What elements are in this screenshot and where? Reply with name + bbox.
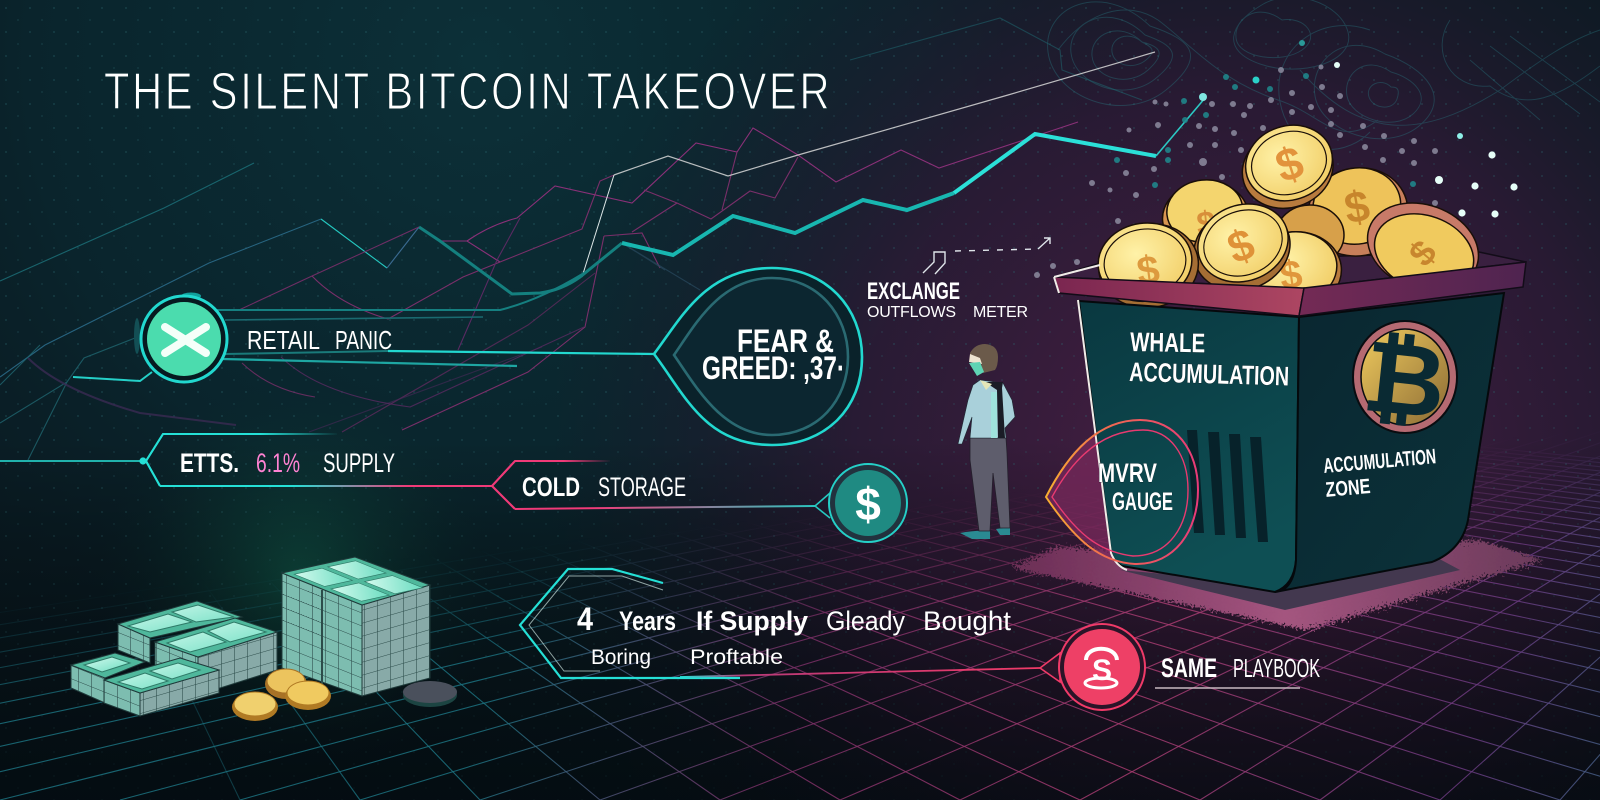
label: retail panic [247,325,392,355]
text: boring profitable: Boring [591,646,651,669]
exchange outflows meter: EXCLANGE [867,278,960,305]
bin interior [1054,252,1526,288]
callout: ETFs supply [0,434,492,486]
icon: meter arrow [923,238,1050,274]
text: years of supply: 4 [577,601,593,637]
bin body right face [1275,293,1504,592]
label: accumulation zone: ZONE [1325,475,1371,502]
text: MVRV gauge: MVRV [1098,458,1157,488]
text: years of supply: Bought [923,606,1012,636]
coin pile: $ [1221,219,1261,274]
icon: same playbook badge: S [1092,654,1112,687]
hair and head [970,344,998,373]
whale accumulation bin [1046,114,1526,610]
exchange outflows meter: OUTFLOWS [867,304,956,321]
text: cold storage: COLD [522,472,580,502]
cash stack: low left [71,653,145,703]
perspective floor grid [0,442,1600,800]
label: whale accumulation [1129,327,1290,391]
figure: person looking at the bin [958,344,1015,539]
exchange outflows meter [867,238,1050,321]
text: fear and greed value [702,323,845,386]
label: accumulation zone: ACCUMULATION [1322,445,1437,478]
vent slots [1187,430,1268,542]
coin pile: $ [1400,232,1445,274]
text: years of supply: Years [619,606,676,636]
topographic contours [1048,0,1600,149]
callout: retail panic [73,273,654,382]
label: retail panic: PANIC [335,325,392,355]
coin pile: $ [1277,252,1305,299]
label: accumulation zone [1322,445,1439,502]
coin pile: $ [1269,135,1310,193]
main rising teal chart line [419,98,1205,294]
trousers [970,438,1010,531]
title: THE SILENT BITCOIN TAKEOVER [104,62,830,120]
bright glowing dots [1199,40,1518,218]
text: boring profitable: Proftable [690,646,783,669]
shoes [960,527,1010,539]
gauge: MVRV [1046,420,1198,564]
coin pile: $ [1134,247,1162,294]
icon: bitcoin medallion: ₿ [1358,317,1451,442]
label: whale accumulation: WHALE [1130,327,1205,358]
label: whale accumulation: ACCUMULATION [1129,357,1290,391]
white highlight edge [1054,265,1127,570]
icon: dollar badge: $ [855,478,881,530]
coin pile [1093,114,1491,318]
label: retail panic: RETAIL [247,325,320,355]
text: years of supply: If Supply [696,606,808,636]
coin pile: $ [1341,181,1373,234]
cash stack: tall [282,557,430,696]
text: MVRV gauge: GAUGE [1112,488,1173,516]
text: years of supply: Gleady [826,606,905,636]
cash stack: middle [155,618,277,695]
text: ETFs 6.1% supply: SUPPLY [323,448,395,478]
cash stack: back [118,601,242,663]
text: years of supply [577,601,1012,637]
icon: same playbook badge [1040,624,1145,710]
exchange outflows meter: METER [973,304,1028,321]
coin pile: $ [1195,204,1218,244]
particle dots [1034,64,1438,278]
label: same playbook [1155,653,1320,688]
callout: cold storage [492,461,815,509]
text: cold storage [522,472,686,502]
text: MVRV gauge [1098,458,1173,516]
label: same playbook: PLAYBOOK [1233,653,1320,683]
shirt [958,380,1015,444]
text: fear and greed value: GREED: ,37· [702,350,845,386]
illustration: stacks of cash [71,557,457,721]
icon: X badge [134,292,227,382]
callout: years of supply already bought [520,569,1040,678]
bin body left face [1079,301,1299,592]
text: cold storage: STORAGE [598,472,686,502]
text: fear and greed value: FEAR & [737,323,834,359]
gauge: fear and greed [654,268,862,445]
text: boring profitable [591,646,783,669]
text: ETFs 6.1% supply: ETTS. [180,448,239,478]
cash stack: low front [104,658,219,716]
magenta glow of gauge tip [1046,435,1115,560]
text: ETFs 6.1% supply: 6.1% [256,448,300,478]
dark coin [403,681,457,707]
small gold coins [232,669,331,721]
icon: dollar badge [815,464,907,542]
label: same playbook: SAME [1161,653,1217,683]
text: ETFs 6.1% supply [180,448,395,478]
stipple ground glow under bin [1011,540,1543,630]
bin rim [1054,262,1526,316]
faint chart lines [0,18,1155,460]
